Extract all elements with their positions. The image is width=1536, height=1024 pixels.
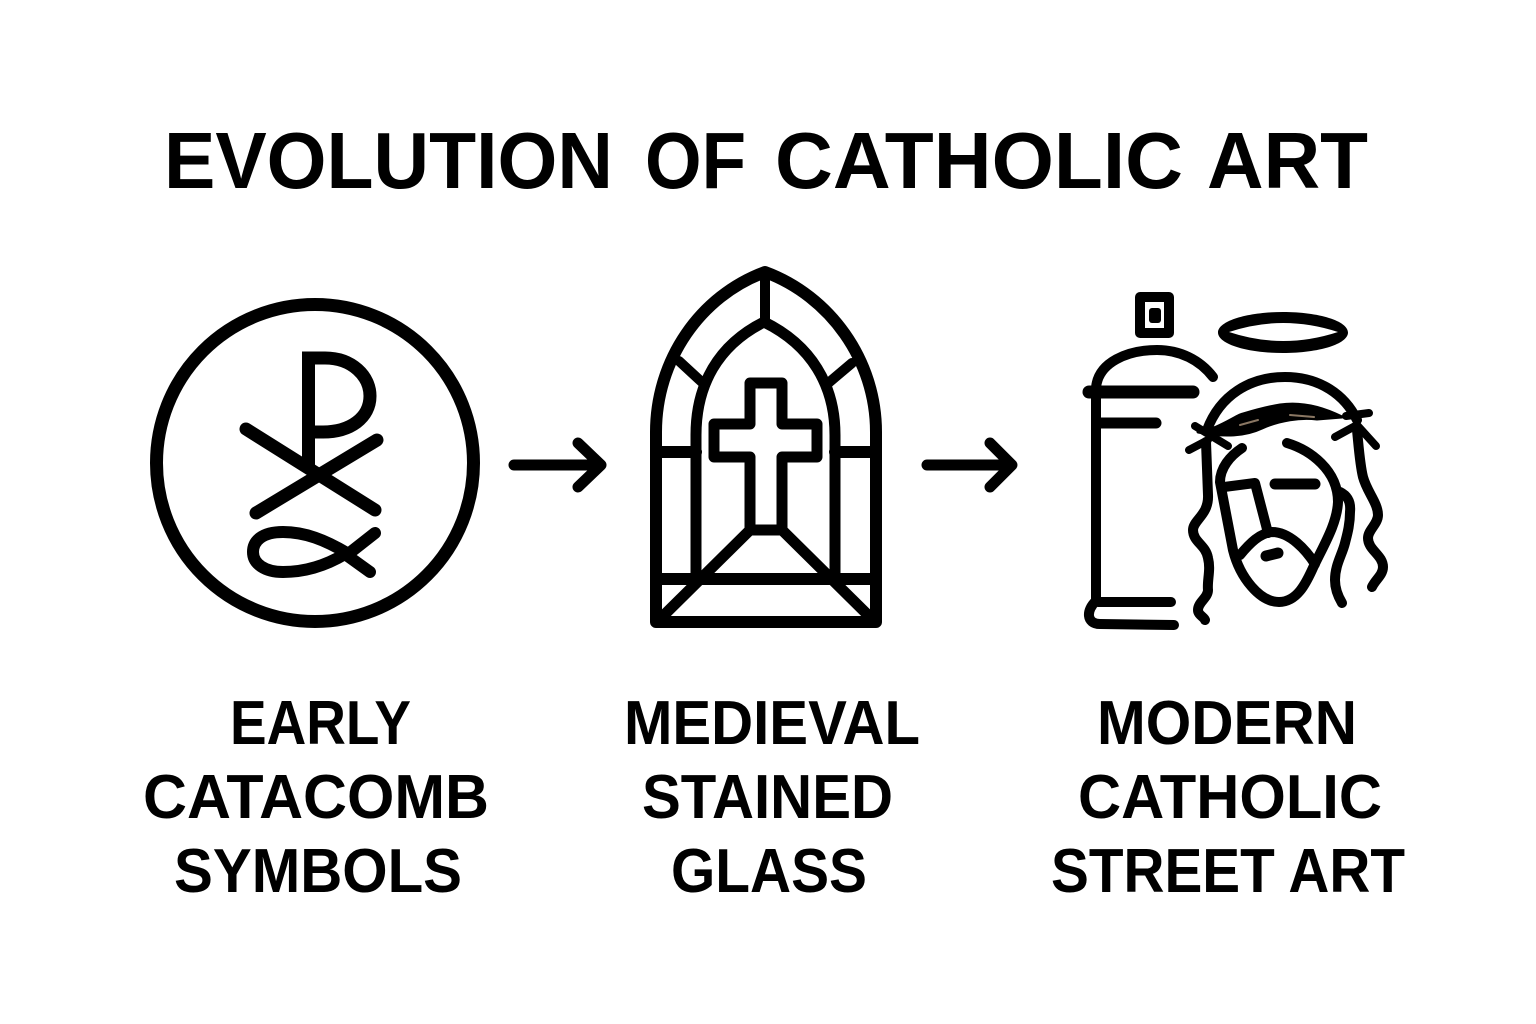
label: early catacomb symbols <box>143 689 489 906</box>
label: modern catholic street art: CATHOLIC <box>1078 763 1382 832</box>
arrow: first to second <box>514 443 601 487</box>
title: ART <box>1207 116 1368 205</box>
label: modern catholic street art <box>1051 689 1405 906</box>
label: medieval stained glass: MEDIEVAL <box>624 689 920 758</box>
label: early catacomb symbols: SYMBOLS <box>174 837 462 906</box>
title: OF <box>645 116 746 205</box>
label: early catacomb symbols: CATACOMB <box>143 763 489 832</box>
arrow: second to third <box>927 443 1012 487</box>
title <box>164 116 1368 205</box>
label: modern catholic street art: STREET ART <box>1051 837 1405 906</box>
title: EVOLUTION <box>164 116 613 205</box>
icon: stained glass window <box>656 272 876 622</box>
label: medieval stained glass <box>624 689 920 906</box>
icon: face of Christ with halo and crown of thorns <box>1189 312 1383 620</box>
label: modern catholic street art: MODERN <box>1097 689 1357 758</box>
label: early catacomb symbols: EARLY <box>230 689 411 758</box>
icon: chi-rho and fish in circle <box>156 304 474 622</box>
label: medieval stained glass: STAINED <box>642 763 893 832</box>
title: CATHOLIC <box>775 116 1183 205</box>
label: medieval stained glass: GLASS <box>671 837 867 906</box>
icon: spray can <box>1089 297 1213 625</box>
